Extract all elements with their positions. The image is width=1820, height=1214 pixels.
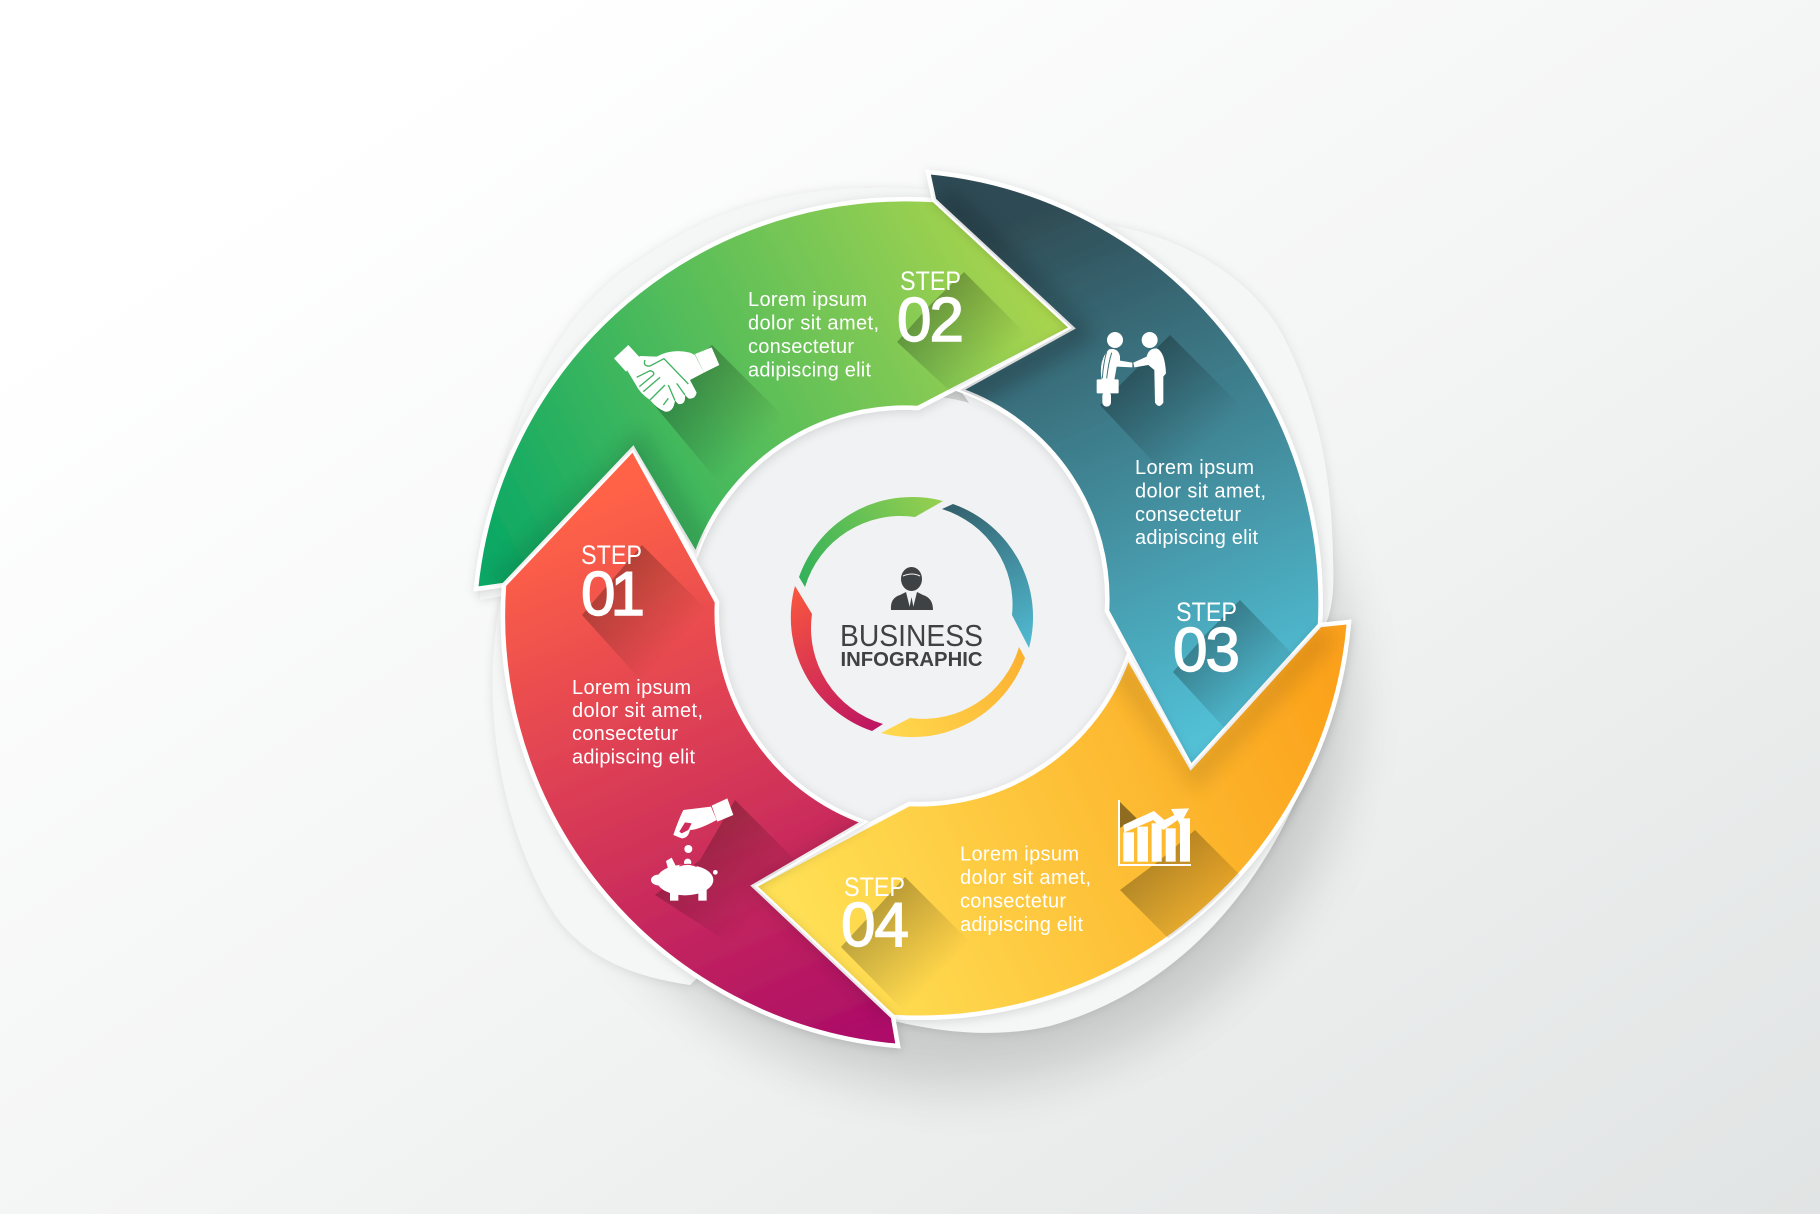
step 01 text: STEP [581,540,642,570]
arrow head shadows [490,190,1335,1017]
step 03 text: STEP [1176,597,1237,627]
ground shadow [550,315,1350,1085]
long shadows: green [650,272,1016,470]
step 03 text: consectetur [1135,504,1241,526]
step 04 text [841,844,1091,960]
step 02 text: consectetur [748,336,854,358]
step 01 text [572,540,703,768]
center title: BUSINESS [840,618,983,653]
step 04 text: dolor sit amet, [960,867,1091,889]
mini ring [791,497,1033,737]
step 01 text: Lorem ipsum [572,677,691,699]
step 01 text: consectetur [572,723,678,745]
panel: step 01 red arrow [503,449,898,1046]
panel: step 03 teal arrow [928,172,1321,767]
icon: two businessmen [1097,332,1166,407]
long shadows: yellow [841,830,1240,1002]
step 03 text: Lorem ipsum [1135,457,1254,479]
step 02 text: Lorem ipsum [748,289,867,311]
icon: chart [1119,800,1191,865]
icon: businessman [891,567,933,610]
step 03 text: adipiscing elit [1135,527,1258,549]
step 04 text: 04 [841,891,909,960]
backing blobs [480,188,1345,1033]
step 04 text: Lorem ipsum [960,844,1079,866]
long shadows: red [582,545,796,934]
long shadows: teal [1100,335,1293,729]
step 01 text: 01 [581,560,645,629]
step 04 text: STEP [844,872,905,902]
step 02 text [748,266,964,382]
panel: step 02 green arrow [476,199,1072,589]
step 04 text: adipiscing elit [960,914,1083,936]
panel: step 04 yellow arrow [754,622,1349,1018]
center disc [689,395,1133,839]
center title [840,618,983,671]
icon: piggy bank [651,798,733,901]
step 02 text: STEP [900,266,961,296]
center title: INFOGRAPHIC [840,649,982,671]
step 04 text: consectetur [960,890,1066,912]
icon: handshake [614,345,719,412]
step 03 text: 03 [1173,616,1240,685]
step 02 text: adipiscing elit [748,360,871,382]
step 01 text: dolor sit amet, [572,700,703,722]
step 02 text: 02 [897,286,964,355]
step 03 text: dolor sit amet, [1135,480,1266,502]
step 03 text [1135,457,1266,685]
step 02 text: dolor sit amet, [748,312,879,334]
step 01 text: adipiscing elit [572,746,695,768]
